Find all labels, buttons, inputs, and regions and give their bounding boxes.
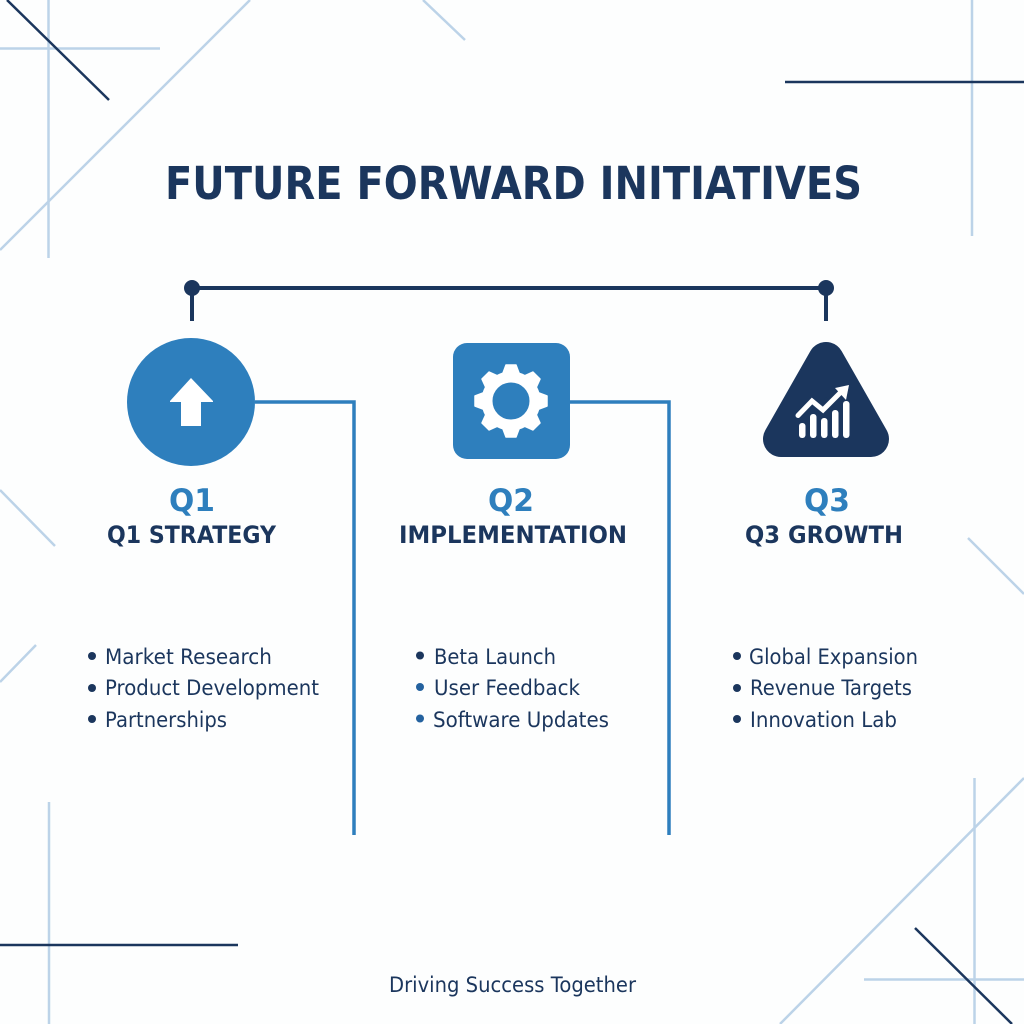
Q1 heading: Q1 STRATEGY — [107, 521, 277, 549]
panel: Q2 implementation — [399, 343, 627, 732]
Q3 label: Q3 — [804, 483, 850, 519]
icon: up arrow in circle — [127, 338, 255, 466]
Q3 bullet list: Revenue Targets — [750, 676, 912, 700]
Q2 bullet list: User Feedback — [434, 676, 581, 700]
Q2 bullet list: Software Updates — [433, 708, 609, 732]
icon: gear in rounded square — [453, 343, 570, 459]
Q3 bullet list — [733, 645, 918, 732]
title: FUTURE FORWARD INITIATIVES — [165, 157, 862, 210]
Q2 label: Q2 — [488, 483, 534, 519]
timeline connector — [184, 280, 834, 321]
Q1 bullet list: Partnerships — [105, 708, 227, 732]
Q1 bullet list: Product Development — [105, 676, 319, 700]
Q3 heading: Q3 GROWTH — [745, 521, 903, 549]
Q1 bullet list — [88, 645, 319, 732]
arrow: Q2 connector line — [570, 402, 669, 835]
Q2 bullet list: Beta Launch — [434, 645, 556, 669]
footer tagline: Driving Success Together — [389, 973, 636, 997]
Q3 bullet list: Innovation Lab — [750, 708, 897, 732]
panel: Q1 strategy — [88, 338, 319, 732]
Q2 bullet list — [416, 645, 609, 732]
Q1 label: Q1 — [169, 483, 215, 519]
Q3 bullet list: Global Expansion — [749, 645, 918, 669]
arrow: Q1 connector line — [255, 402, 354, 835]
icon: growth chart in triangle — [781, 360, 871, 439]
Q2 heading: IMPLEMENTATION — [399, 521, 627, 549]
panel: Q3 growth — [733, 360, 918, 732]
Q1 bullet list: Market Research — [105, 645, 272, 669]
